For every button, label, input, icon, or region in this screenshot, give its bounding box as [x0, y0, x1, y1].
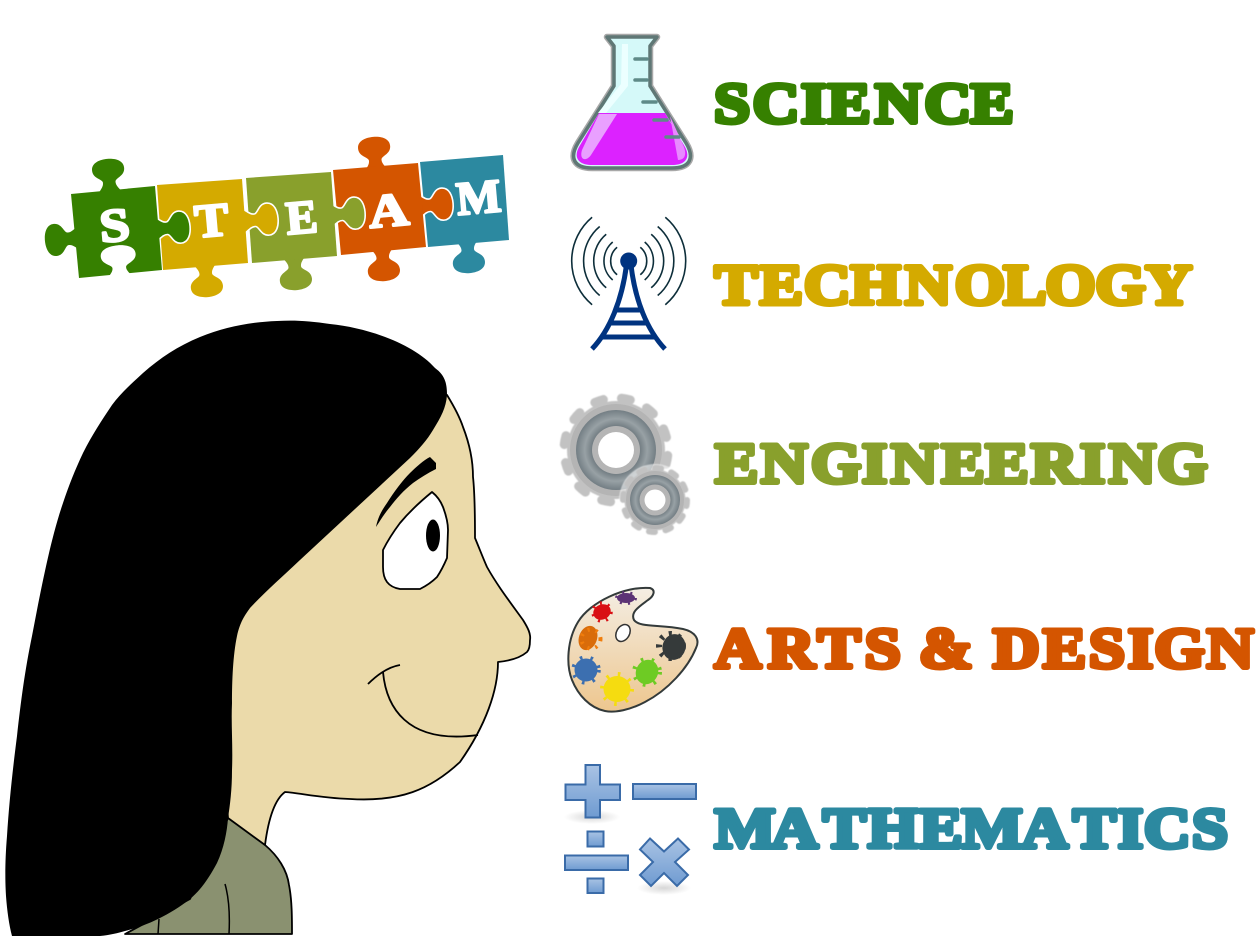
paint: red — [591, 601, 613, 623]
times — [640, 838, 689, 886]
STEAM puzzle logo — [44, 136, 509, 298]
puzzle piece: E — [246, 172, 366, 291]
pupil — [426, 520, 440, 552]
label: mathematics: MATHEMATICS — [715, 798, 1228, 861]
label: engineering: ENGINEERING — [715, 433, 1208, 496]
icon: paint palette — [568, 588, 697, 712]
eye — [383, 492, 448, 589]
paint: green — [632, 656, 662, 688]
icon: math symbols — [564, 765, 696, 895]
paint: orange — [575, 623, 601, 653]
icon: flask — [574, 37, 690, 168]
letter T: T — [192, 192, 231, 248]
shirt — [125, 818, 292, 934]
letter E: E — [284, 191, 320, 245]
woman in profile — [5, 321, 530, 936]
small gear — [619, 464, 691, 536]
minus — [633, 784, 696, 799]
divide — [565, 832, 628, 893]
puzzle piece: T — [157, 179, 279, 298]
hair — [5, 321, 447, 936]
puzzle piece: M — [420, 155, 509, 274]
label: science: SCIENCE — [714, 73, 1014, 136]
paint: blue — [574, 658, 598, 682]
puzzle piece: S — [44, 158, 191, 282]
paint: purple — [616, 592, 636, 604]
paint: yellow — [602, 674, 632, 704]
puzzle piece: A — [333, 136, 454, 282]
eyebrow — [376, 457, 436, 527]
paint: black — [659, 631, 688, 663]
smile — [368, 665, 478, 737]
icon: radio tower — [572, 217, 686, 349]
plus — [566, 765, 620, 818]
label: technology: TECHNOLOGY — [715, 254, 1192, 317]
letter M: M — [454, 170, 503, 226]
large gear — [559, 393, 673, 507]
letter S: S — [97, 198, 132, 252]
label: arts and design: ARTS & DESIGN — [715, 618, 1253, 681]
letter A: A — [366, 183, 411, 239]
face — [215, 395, 530, 845]
icon: gears — [559, 393, 691, 536]
